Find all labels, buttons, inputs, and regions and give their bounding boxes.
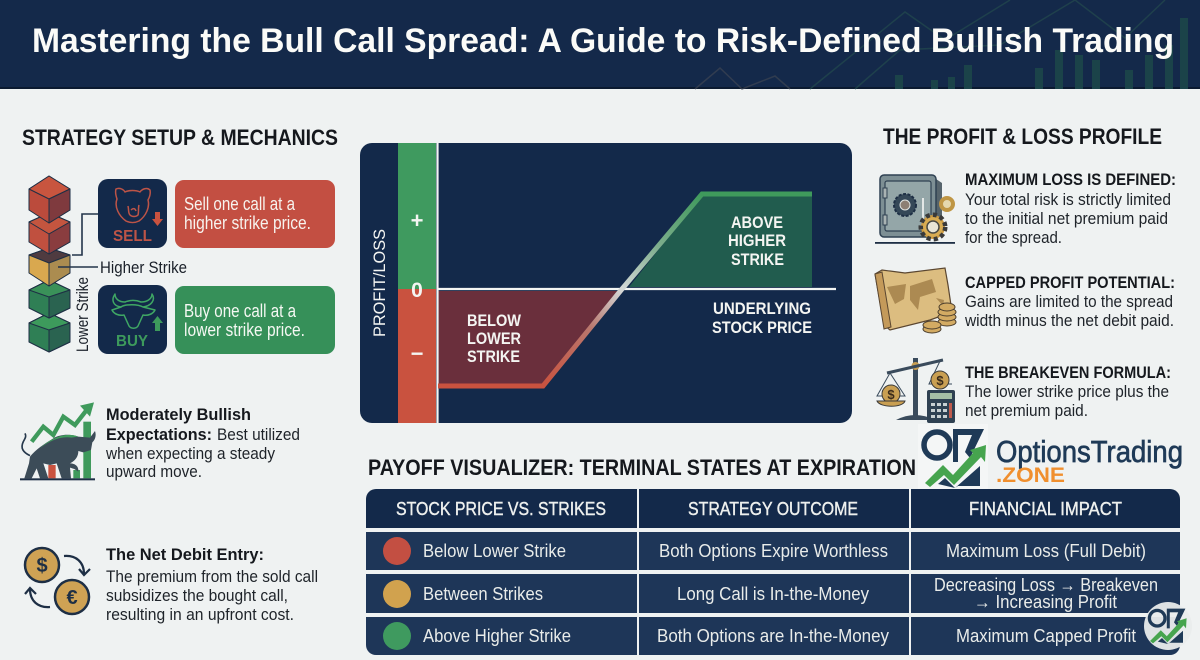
icon: currency exchange: € <box>66 587 78 609</box>
payoff line <box>438 194 812 386</box>
text: net debit entry: resulting in an upfront cost. <box>106 606 294 624</box>
icon: bull market <box>20 402 96 480</box>
icon: currency exchange: $ <box>36 555 48 577</box>
buy label: BUY <box>116 333 148 350</box>
table header row: STOCK PRICE VS. STRIKES <box>396 499 606 519</box>
label: above higher strike <box>728 214 786 269</box>
higher strike line <box>58 266 98 268</box>
loss region <box>438 291 618 384</box>
watermark logo badge <box>1144 602 1192 650</box>
text: maximum loss: Your total risk is strictly limited <box>965 191 1171 209</box>
text: moderately bullish: when expecting a steady <box>105 445 276 463</box>
text: breakeven formula: THE BREAKEVEN FORMULA: <box>965 364 1171 382</box>
text: moderately bullish: Best utilized <box>217 426 300 444</box>
sell down arrow <box>152 212 163 226</box>
text: capped profit: Gains are limited to the spread <box>965 293 1173 311</box>
y axis label: PROFIT/LOSS <box>370 229 389 337</box>
bear head <box>116 188 150 222</box>
heading: profit and loss: THE PROFIT & LOSS PROFILE <box>883 124 1162 149</box>
text: net debit entry: The premium from the sold call <box>106 568 318 586</box>
text: net debit entry: The Net Debit Entry: <box>106 545 264 564</box>
label: underlying stock price: UNDERLYING <box>713 300 811 318</box>
label: below lower strike: STRIKE <box>467 348 520 366</box>
connector to sell <box>72 214 98 255</box>
text: moderately bullish: upward move. <box>106 463 202 481</box>
axes <box>438 143 836 423</box>
row: above higher strike: Maximum Capped Profit <box>956 626 1136 646</box>
text: breakeven formula: The lower strike price plus the <box>965 383 1169 401</box>
sell card: Sell one call at a <box>184 194 296 214</box>
icon: treasure map and coins <box>875 268 956 333</box>
row: above higher strike: Above Higher Strike <box>423 626 571 646</box>
text: moderately bullish: Expectations: <box>106 425 212 444</box>
buy up arrow <box>152 316 163 331</box>
icon: currency exchange <box>25 548 90 614</box>
profit region <box>629 196 812 287</box>
row: between strikes: Decreasing Loss → Breakeven <box>934 575 1158 595</box>
sell card <box>175 180 335 248</box>
table header row: STRATEGY OUTCOME <box>688 499 858 519</box>
header banner <box>0 0 1200 89</box>
icon: safe <box>875 175 955 244</box>
icon: balance scale and calculator: $ <box>936 373 944 388</box>
text: moderately bullish: Moderately Bullish <box>106 405 251 424</box>
buy card: lower strike price. <box>184 320 305 340</box>
row: below lower strike: Maximum Loss (Full Debit) <box>946 541 1146 561</box>
text: maximum loss: for the spread. <box>965 229 1062 247</box>
profit axis band <box>398 143 436 289</box>
buy card: Buy one call at a <box>184 301 297 321</box>
payoff chart panel <box>360 143 852 423</box>
higher strike label: Higher Strike <box>100 259 187 277</box>
sell label: SELL <box>113 228 152 245</box>
heading: payoff visualizer: PAYOFF VISUALIZER: TERMINAL STATES AT EXPIRATION <box>368 455 916 480</box>
table header row <box>366 489 1180 528</box>
bull head <box>112 294 155 328</box>
sell card: higher strike price. <box>184 213 311 233</box>
row: between strikes <box>366 574 1180 613</box>
label: above higher strike: HIGHER <box>728 232 786 250</box>
text: breakeven formula <box>965 364 1171 420</box>
title: Mastering the Bull Call Spread: A Guide to Risk-Defined Bullish Trading <box>32 22 1174 60</box>
buy tile with bull icon <box>98 285 167 354</box>
label: below lower strike: LOWER <box>467 330 521 348</box>
text: net debit entry: subsidizes the bought call, <box>106 587 288 605</box>
lower strike label: Lower Strike <box>74 277 92 352</box>
row: above higher strike: Both Options are In-the-Money <box>657 626 889 646</box>
icon: balance scale and calculator: $ <box>887 387 895 402</box>
text: capped profit: CAPPED PROFIT POTENTIAL: <box>965 274 1175 292</box>
sell tile with bear icon <box>98 179 167 248</box>
payoff table <box>366 489 1180 655</box>
text: capped profit <box>964 274 1175 330</box>
label: above higher strike: STRIKE <box>731 251 784 269</box>
label: underlying stock price <box>712 300 812 337</box>
loss axis band <box>398 289 436 423</box>
text: net debit entry <box>106 545 318 624</box>
row: below lower strike: Below Lower Strike <box>423 541 566 561</box>
minus sign: − <box>411 341 423 366</box>
text: capped profit: width minus the net debit paid. <box>964 312 1174 330</box>
text: maximum loss: MAXIMUM LOSS IS DEFINED: <box>965 171 1176 189</box>
buy card <box>175 286 335 354</box>
heading: strategy setup: STRATEGY SETUP & MECHANICS <box>22 125 338 150</box>
label: above higher strike: ABOVE <box>731 214 783 232</box>
zero: 0 <box>411 279 423 302</box>
row: between strikes: Between Strikes <box>423 584 543 604</box>
row: between strikes: Long Call is In-the-Money <box>677 584 869 604</box>
row: below lower strike <box>366 532 1180 570</box>
text: breakeven formula: net premium paid. <box>965 402 1088 420</box>
text: maximum loss <box>965 171 1176 247</box>
icon: balance scale and calculator <box>877 358 955 423</box>
logo zone text: .ZONE <box>996 464 1065 487</box>
text: maximum loss: to the initial net premium paid <box>965 210 1168 228</box>
text: moderately bullish <box>105 405 300 481</box>
label: below lower strike <box>467 312 521 366</box>
row: between strikes: → Increasing Profit <box>974 592 1117 612</box>
strike ladder of cubes <box>29 176 70 352</box>
label: below lower strike: BELOW <box>467 312 521 330</box>
label: underlying stock price: STOCK PRICE <box>712 319 812 337</box>
table header row: FINANCIAL IMPACT <box>969 499 1122 519</box>
row: above higher strike <box>366 617 1180 655</box>
logo mark <box>918 424 988 489</box>
plus sign: + <box>411 208 423 233</box>
row: below lower strike: Both Options Expire Worthless <box>659 541 888 561</box>
